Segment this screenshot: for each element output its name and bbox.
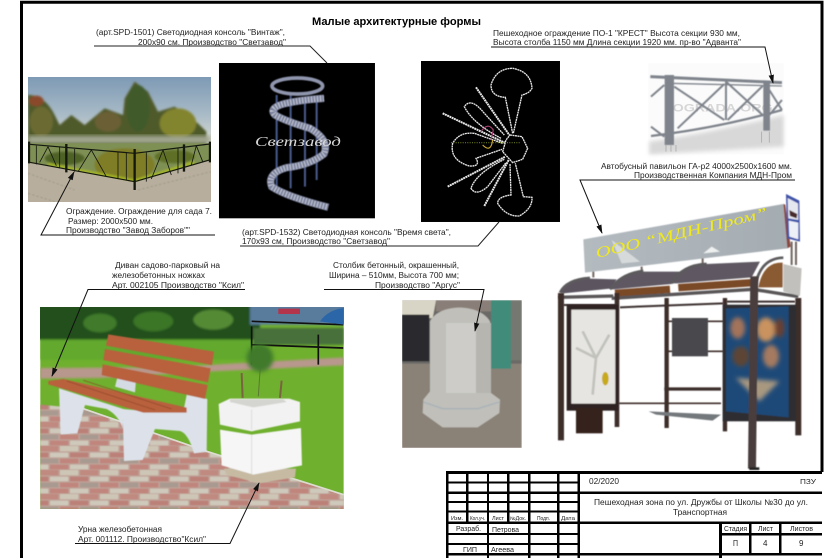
photo: garden fence [28, 75, 211, 205]
cars and rail [252, 321, 343, 365]
callout: bollard [324, 261, 484, 331]
sign board [583, 204, 787, 273]
photo: bench and urn [33, 301, 350, 509]
title block text: Кол.уч. [470, 516, 485, 522]
photo: pedestrian railing KREST: OGRADA.ORG [673, 103, 773, 115]
title block [446, 471, 822, 558]
title block text: Пешеходная зона по ул. Дружбы от Школы №30 до ул. [594, 498, 808, 507]
photo: LED console Vintage [219, 63, 375, 218]
title block text: Петрова [492, 527, 519, 534]
callout: console Time of light [240, 222, 499, 246]
bench [48, 334, 214, 461]
bench [649, 411, 721, 421]
callout: garden fence: Производство "Завод Заборов"" [66, 226, 190, 235]
callout: bench: Арт. 002105 Производство "Ксил" [112, 281, 244, 290]
title block text [451, 477, 817, 554]
text: sign OOO MDN-Prom: ООО “МДН-Пром” [594, 206, 769, 262]
title block text: Листов [790, 526, 813, 533]
roof arches [560, 279, 617, 293]
photo: pedestrian railing KREST [648, 63, 784, 154]
title: Малые архитектурные формы [312, 16, 481, 28]
callout: console Time of light: (арт.SPD-1532) Светодиодная консоль "Время света", [242, 228, 451, 237]
stop sign [786, 194, 800, 242]
title block text: Лист [492, 516, 505, 522]
poster: left [567, 305, 618, 411]
title block text: 4 [763, 539, 768, 548]
callout: bus pavilion [580, 162, 795, 233]
title block text: Изм. [451, 516, 463, 522]
title block text: Транспортная [673, 508, 727, 517]
title block text: Дата [561, 516, 575, 522]
title block text: Стадия [724, 526, 747, 533]
callout: bollard: Производство "Аргус" [375, 281, 460, 290]
callout: garden fence: Ограждение. Ограждение для сада 7. [66, 207, 212, 216]
callout: pedestrian railing [491, 29, 773, 83]
poster: right [723, 305, 796, 421]
title block text: 02/2020 [589, 477, 620, 486]
title block text: Подп. [537, 516, 550, 522]
title block text: Лист [758, 526, 774, 533]
callout: bollard: Столбик бетонный, окрашенный, [333, 261, 459, 270]
title block text: ГИП [463, 547, 477, 554]
posts [561, 293, 798, 440]
center panel [672, 318, 708, 356]
callout: bollard: Ширина – 510мм, Высота 700 мм; [329, 271, 459, 280]
callout: bench: Диван садово-парковый на [115, 261, 221, 270]
sapling [242, 373, 282, 398]
title block text: 9 [799, 539, 804, 548]
callout: console Vintage: 200х90 см. Производство "Светзавод" [138, 38, 286, 47]
title block text: П [733, 539, 738, 548]
photo: bus pavilion [558, 194, 802, 469]
callout: console Vintage [94, 28, 327, 63]
title block text: Агеева [491, 547, 514, 554]
title block text: №Док. [510, 516, 526, 522]
callout: bench: железобетонных ножках [112, 271, 205, 280]
callout: bench [52, 261, 245, 376]
title block text: Разраб. [456, 525, 481, 533]
callout: console Time of light: 170х93 см, Производство "Светзавод" [242, 237, 390, 246]
callout: pedestrian railing: Высота столба 1150 мм Длина секции 1920 мм. пр-во "Адванта" [493, 38, 741, 47]
callout: bus pavilion: Производственная Компания МДН-Пром [634, 171, 792, 180]
callout: garden fence [41, 172, 215, 235]
callout: urn: Урна железобетонная [78, 525, 162, 534]
callout: urn: Арт. 001112. Производство"Ксил" [78, 535, 206, 544]
photo: concrete bollard [402, 300, 522, 448]
photo: LED console Time of light [421, 61, 560, 222]
title block text: ПЗУ [800, 479, 817, 486]
callout: bus pavilion: Автобусный павильон ГА-р2 4000х2500х1600 мм. [601, 162, 792, 171]
callout: console Vintage: (арт.SPD-1501) Светодиодная консоль "Винтаж", [96, 28, 285, 37]
callout: urn [75, 483, 259, 544]
urn [219, 399, 302, 483]
callout: garden fence: Размер: 2000х500 мм. [68, 217, 153, 226]
front post [752, 276, 754, 469]
photo: LED console Vintage: Светзавод [255, 134, 341, 149]
callout: pedestrian railing: Пешеходное ограждение ПО-1 "КРЕСТ" Высота секции 930 мм, [493, 29, 740, 38]
pavers [40, 405, 344, 509]
